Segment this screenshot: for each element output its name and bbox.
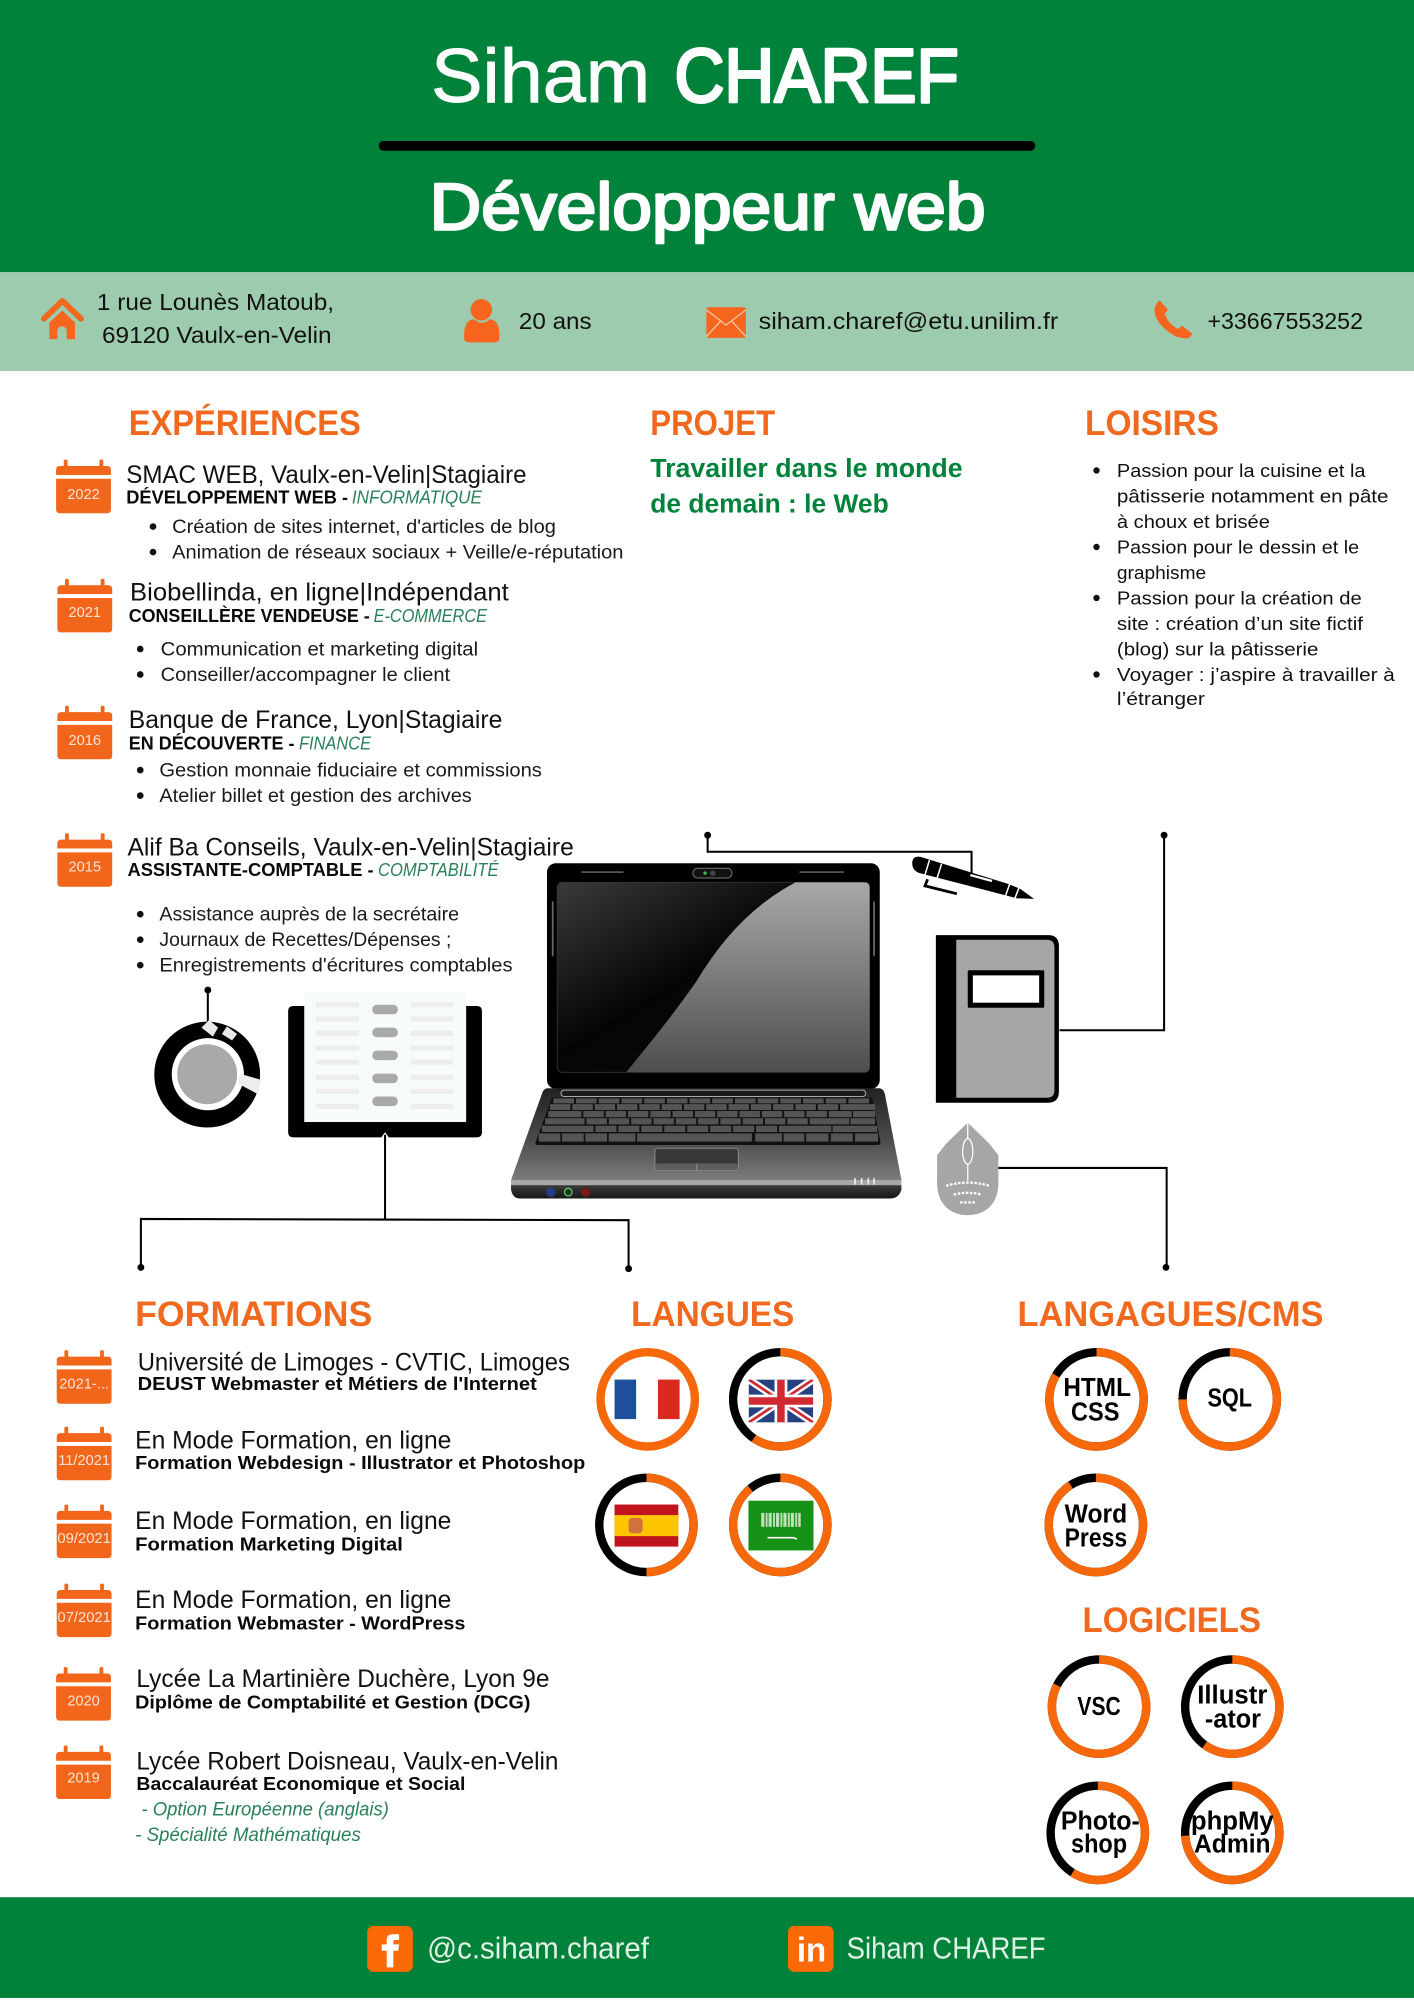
language ring: arabe	[733, 1478, 827, 1572]
formation: baccalauréat: Baccalauréat Economique et Social	[136, 1774, 465, 1794]
hobbies list: pâtisserie notamment en pâte	[1117, 485, 1388, 506]
panel: expériences	[56, 403, 623, 977]
illustration: desk connectors	[137, 832, 1169, 1272]
experience 2016: FINANCE	[299, 734, 372, 754]
skill ring: WordPress	[1049, 1478, 1143, 1572]
skill ring: phpMyAdmin: phpMy	[1191, 1808, 1275, 1836]
icon: notebook	[936, 935, 1059, 1103]
project statement: de demain : le Web	[650, 491, 889, 519]
experience 2016: Banque de France, Lyon|Stagiaire	[129, 706, 502, 734]
hobbies list: l’étranger	[1117, 688, 1205, 709]
hobbies list: (blog) sur la pâtisserie	[1117, 638, 1318, 659]
experience 2021: Conseiller/accompagner le client	[161, 664, 451, 686]
skill ring: Illustrator: -ator	[1205, 1706, 1261, 1734]
project statement	[650, 455, 963, 519]
icon: calendar 2021	[57, 579, 112, 632]
icon: calendar 2015	[57, 833, 112, 887]
icon: calendar 09/2021: 09/2021	[57, 1531, 111, 1547]
address	[97, 289, 334, 348]
formation: baccalauréat: - Spécialité Mathématiques	[135, 1825, 361, 1846]
icon: calendar 07/2021: 07/2021	[57, 1610, 111, 1626]
hobbies list: site : création d’un site fictif	[1117, 613, 1364, 634]
experience 2021: E-COMMERCE	[374, 606, 488, 626]
icon: person	[464, 299, 499, 342]
experience 2015: COMPTABILITÉ	[378, 860, 499, 880]
heading: langages/cms: LANGAGUES/CMS	[1017, 1295, 1323, 1334]
icon: calendar 2016	[57, 706, 112, 759]
laptop deck	[511, 1088, 901, 1180]
experience 2022: INFORMATIQUE	[352, 488, 483, 508]
laptop trackpad	[655, 1148, 738, 1170]
heading: projet: PROJET	[650, 404, 776, 443]
panel: projet	[650, 404, 963, 519]
icon: calendar 11/2021	[57, 1427, 112, 1480]
formation: webmaster	[57, 1584, 465, 1637]
experience 2016: Gestion monnaie fiduciaire et commissions	[159, 759, 542, 781]
language ring: espagnol	[599, 1478, 694, 1572]
panel: langues	[599, 1295, 827, 1572]
skill ring: VSC	[1052, 1659, 1146, 1754]
header banner	[0, 0, 1414, 272]
formation: DCG: Diplôme de Comptabilité et Gestion (DCG)	[135, 1693, 530, 1713]
skill ring: SQL	[1183, 1352, 1277, 1447]
experience 2021: Biobellinda, en ligne|Indépendant	[130, 579, 509, 607]
experience 2016: Atelier billet et gestion des archives	[159, 785, 472, 807]
facebook handle: @c.siham.charef	[427, 1931, 649, 1965]
email: siham.charef@etu.unilim.fr	[759, 308, 1059, 334]
formation: webmaster: En Mode Formation, en ligne	[135, 1586, 451, 1614]
illustration: laptop	[511, 863, 901, 1199]
icon: calendar 2021	[57, 1350, 112, 1404]
icon: calendar 2015: 2015	[68, 859, 101, 875]
icon: calendar 2022	[56, 460, 111, 513]
icon: linkedin	[788, 1926, 834, 1972]
icon: calendar 07/2021	[57, 1584, 112, 1637]
formation: université: Université de Limoges - CVTIC, Limoges	[138, 1349, 570, 1377]
panel: langages / CMS	[1017, 1295, 1323, 1572]
formation: webdesign: Formation Webdesign - Illustrator et Photoshop	[135, 1453, 585, 1473]
skill ring: Photoshop	[1051, 1786, 1145, 1880]
formation: baccalauréat: Lycée Robert Doisneau, Vaulx-en-Velin	[136, 1748, 558, 1776]
icon: phone	[1155, 300, 1193, 338]
address: 1 rue Lounès Matoub,	[97, 289, 334, 315]
heading: logiciels: LOGICIELS	[1082, 1601, 1261, 1640]
hobbies list: à choux et brisée	[1117, 511, 1270, 532]
panel: formations	[56, 1295, 585, 1846]
icon: mouse	[937, 1122, 998, 1215]
experience 2021: Communication et marketing digital	[161, 638, 478, 660]
contact band	[0, 272, 1414, 371]
skill ring: HTML CSS: CSS	[1071, 1398, 1119, 1426]
icon: pen	[912, 857, 1034, 899]
skill ring: Photoshop: shop	[1071, 1831, 1127, 1859]
skill ring: Illustrator: Illustr	[1197, 1681, 1267, 1709]
skill ring: HTML CSS: HTML	[1063, 1374, 1131, 1402]
experience 2015: Assistance auprès de la secrétaire	[159, 904, 459, 926]
subtitle: job title: Développeur web	[430, 171, 986, 245]
age: 20 ans	[519, 308, 592, 334]
experience 2015: ASSISTANTE-COMPTABLE -	[128, 860, 374, 880]
formation: baccalauréat: - Option Européenne (anglais)	[142, 1800, 389, 1821]
skill ring: phpMyAdmin: Admin	[1194, 1831, 1271, 1859]
icon: coffee cup	[154, 1020, 261, 1128]
skill ring: Photoshop: Photo-	[1061, 1808, 1140, 1836]
icon: calendar 2019	[56, 1746, 111, 1799]
language ring: anglais	[733, 1352, 827, 1447]
experience 2022: DÉVELOPPEMENT WEB -	[126, 487, 348, 508]
laptop lid	[547, 863, 880, 1089]
icon: envelope	[706, 307, 746, 338]
experience 2022	[56, 460, 623, 563]
hobbies list: Passion pour la création de	[1117, 587, 1362, 608]
experience 2016	[57, 706, 542, 807]
footer banner	[0, 1897, 1414, 1998]
laptop keyboard	[535, 1097, 880, 1145]
experience 2015: Alif Ba Conseils, Vaulx-en-Velin|Stagiaire	[128, 834, 574, 862]
formation: DCG: Lycée La Martinière Duchère, Lyon 9e	[136, 1665, 550, 1693]
skill ring: SQL: SQL	[1207, 1384, 1252, 1412]
formation: université	[57, 1349, 570, 1404]
icon: linkedin: in	[797, 1932, 826, 1970]
skill ring: Illustrator	[1185, 1659, 1279, 1754]
experience 2015: Enregistrements d'écritures comptables	[159, 955, 513, 977]
title: name: CHAREF	[674, 34, 959, 119]
hobbies list: Voyager : j’aspire à travailler à	[1117, 664, 1396, 685]
hobbies list: graphisme	[1117, 562, 1206, 583]
formation: baccalauréat	[56, 1746, 558, 1846]
skill ring: WordPress: Press	[1065, 1525, 1127, 1553]
experience 2021	[57, 579, 509, 686]
formation: webmaster: Formation Webmaster - WordPress	[135, 1613, 465, 1633]
experience 2022: SMAC WEB, Vaulx-en-Velin|Stagiaire	[126, 461, 527, 489]
hobbies list: Passion pour la cuisine et la	[1117, 460, 1366, 481]
experience 2022: Animation de réseaux sociaux + Veille/e-réputation	[172, 541, 623, 563]
heading: formations: FORMATIONS	[135, 1295, 372, 1334]
panel: logiciels	[1051, 1601, 1279, 1880]
title: name	[431, 34, 959, 119]
skill ring: WordPress: Word	[1065, 1500, 1127, 1528]
icon: calendar 2021: 2021	[68, 605, 101, 621]
icon: calendar 11/2021: 11/2021	[58, 1453, 110, 1469]
hobbies list	[1093, 460, 1396, 709]
formation: marketing: En Mode Formation, en ligne	[135, 1507, 451, 1535]
icon: calendar 2016: 2016	[68, 733, 101, 749]
heading: expériences: EXPÉRIENCES	[129, 403, 361, 443]
icon: calendar 2019: 2019	[67, 1770, 100, 1786]
skill ring: phpMyAdmin	[1185, 1786, 1279, 1880]
icon: calendar 09/2021	[57, 1505, 112, 1558]
formation: université: DEUST Webmaster et Métiers de l'Internet	[138, 1374, 537, 1394]
icon: calendar 2021: 2021-...	[59, 1376, 109, 1392]
icon: calendar 2020	[56, 1667, 111, 1721]
formation: marketing: Formation Marketing Digital	[135, 1534, 403, 1554]
heading: loisirs: LOISIRS	[1085, 404, 1219, 443]
experience 2015: Journaux de Recettes/Dépenses ;	[159, 929, 451, 951]
hobbies list: Passion pour le dessin et le	[1117, 536, 1359, 557]
formation: webdesign	[57, 1426, 585, 1480]
icon: calendar 2022: 2022	[67, 487, 100, 503]
skill ring: HTML CSS	[1049, 1352, 1144, 1447]
experience 2015	[57, 833, 574, 977]
icon: open book	[288, 992, 482, 1137]
phone number: +33667553252	[1207, 308, 1363, 334]
experience 2021: CONSEILLÈRE VENDEUSE -	[129, 605, 370, 626]
icon: calendar 2020: 2020	[67, 1693, 100, 1709]
skill ring: VSC: VSC	[1077, 1693, 1121, 1721]
experience 2016: EN DÉCOUVERTE -	[129, 733, 295, 754]
experience 2022: Création de sites internet, d'articles de blog	[172, 516, 556, 538]
laptop front edge	[511, 1178, 901, 1199]
icon: house	[44, 301, 81, 339]
formation: webdesign: En Mode Formation, en ligne	[135, 1426, 451, 1454]
panel: loisirs	[1085, 404, 1396, 709]
formation: DCG	[56, 1665, 550, 1721]
address: 69120 Vaulx-en-Velin	[102, 322, 332, 348]
language ring: français	[601, 1352, 695, 1447]
icon: facebook	[367, 1926, 413, 1972]
title: name: Siham	[431, 34, 650, 119]
linkedin name: Siham CHAREF	[847, 1931, 1046, 1965]
heading: langues: LANGUES	[631, 1295, 794, 1334]
project statement: Travailler dans le monde	[650, 455, 963, 483]
formation: marketing	[57, 1505, 451, 1558]
